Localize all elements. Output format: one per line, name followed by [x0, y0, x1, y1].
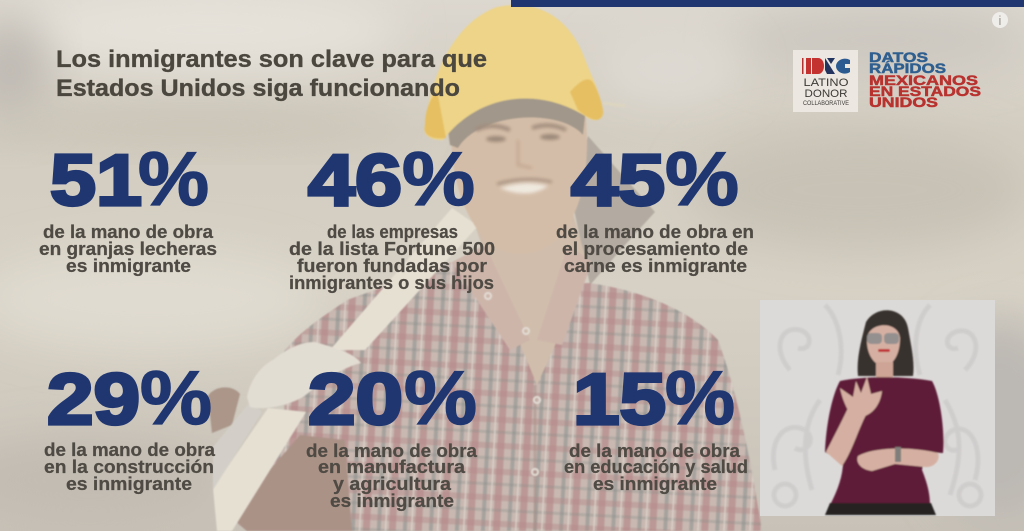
- heading: Datos rápidos mexicanos en Estados Unidos: RÁPIDOS: [869, 60, 946, 76]
- stat: 20%: y agricultura: [333, 473, 452, 494]
- stat: 45%: de la mano de obra en: [556, 221, 754, 242]
- stat: 20%: en manufactura: [318, 456, 466, 477]
- heading: Datos rápidos mexicanos en Estados Unidos: DATOS: [869, 49, 928, 65]
- stat: 46%: de las empresas: [327, 221, 458, 242]
- stat: 45%: [556, 137, 754, 276]
- stat: 29%: 29: [47, 360, 140, 440]
- stat: 46%: [289, 137, 495, 293]
- dark tool behind shoulder: [572, 136, 655, 285]
- glove cuff: [213, 402, 262, 490]
- hand behind glove: [208, 387, 240, 433]
- stat: 51%: %: [138, 137, 209, 222]
- info icon: i: [999, 13, 1002, 28]
- stat: 46%: fueron fundadas por: [297, 255, 487, 276]
- stat: 46%: inmigrantes o sus hijos: [289, 272, 494, 293]
- collar: [452, 245, 592, 350]
- stat: 15%: de la mano de obra: [569, 440, 741, 461]
- stat: 15%: 15: [573, 360, 666, 440]
- glove: [247, 342, 361, 408]
- stat: 46%: %: [402, 137, 475, 222]
- face: [451, 103, 587, 254]
- stat: 45%: carne es inmigrante: [564, 255, 747, 276]
- stat: 20%: [306, 356, 478, 511]
- placket line: [534, 385, 536, 531]
- stat: 29%: %: [140, 356, 212, 441]
- stat: 29%: en la construcción: [44, 456, 214, 477]
- shirt: [233, 262, 762, 531]
- stat: 51%: en granjas lecheras: [39, 238, 217, 259]
- heading: Datos rápidos mexicanos en Estados Unidos: MEXICANOS: [869, 72, 978, 88]
- stat: 46%: 46: [308, 141, 402, 221]
- left sleeve shading: [233, 435, 352, 531]
- interpreter: [825, 310, 943, 515]
- stat: 46%: de la lista Fortune 500: [289, 238, 495, 259]
- stat: 20%: de la mano de obra: [306, 440, 478, 461]
- stat: 29%: de la mano de obra: [44, 439, 216, 460]
- stat: 15%: en educación y salud: [564, 456, 748, 477]
- title: Los inmigrantes son clave para que: [56, 46, 487, 73]
- buttons: [485, 293, 540, 475]
- stat: 45%: %: [665, 137, 739, 222]
- stat: 51%: de la mano de obra: [43, 221, 214, 242]
- stat: 15%: %: [665, 356, 735, 441]
- info icon: [992, 12, 1008, 28]
- stat: 51%: 51: [50, 141, 142, 221]
- stat: 29%: es inmigrante: [66, 473, 192, 494]
- heading: Datos rápidos mexicanos en Estados Unidos: EN ESTADOS: [869, 83, 981, 99]
- title: Estados Unidos siga funcionando: [56, 75, 460, 102]
- heading: Datos rápidos mexicanos en Estados Unidos: [869, 49, 981, 110]
- logo: Latino Donor Collaborative: COLLABORATIVE: [803, 101, 849, 107]
- stat: 45%: 45: [571, 141, 665, 221]
- stat: 51%: es inmigrante: [66, 255, 191, 276]
- logo: Latino Donor Collaborative: LATINO: [804, 77, 849, 89]
- stat: 29%: [44, 356, 216, 494]
- logo: Latino Donor Collaborative: [793, 50, 858, 112]
- helmet: [424, 5, 603, 140]
- neck and open collar: [470, 210, 589, 385]
- photo: construction worker: [208, 5, 762, 531]
- heading: Datos rápidos mexicanos en Estados Unidos: UNIDOS: [869, 94, 938, 110]
- top bar: [511, 0, 1024, 7]
- title: [56, 46, 487, 102]
- stat: 15%: es inmigrante: [593, 473, 717, 494]
- logo: Latino Donor Collaborative: DONOR: [804, 88, 848, 100]
- wooden plank: [213, 208, 478, 531]
- sign language interpreter panel: [760, 300, 995, 516]
- stat: 51%: [39, 137, 217, 276]
- stat: 45%: el procesamiento de: [562, 238, 748, 259]
- stat: 15%: [564, 356, 748, 494]
- stat: 20%: %: [404, 356, 477, 441]
- stat: 20%: 20: [308, 360, 403, 440]
- stat: 20%: es inmigrante: [330, 490, 454, 511]
